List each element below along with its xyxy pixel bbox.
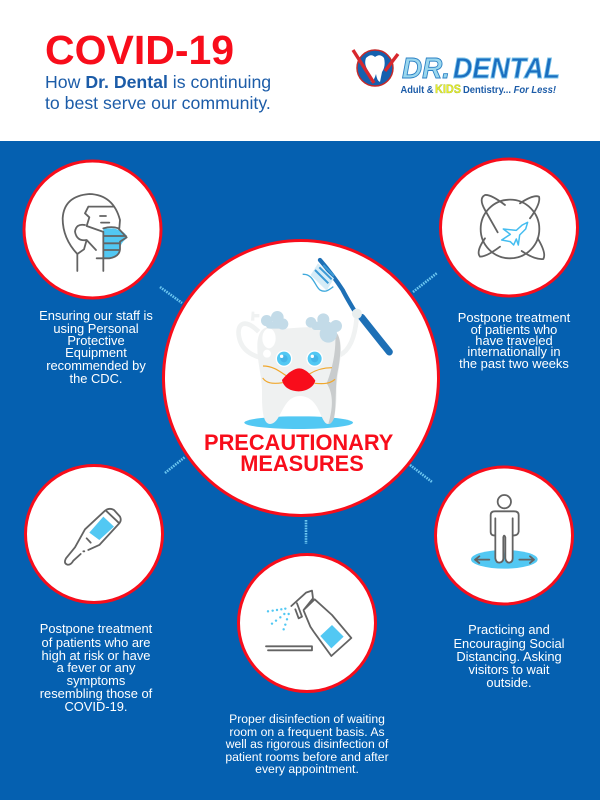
- text: travel: have traveled: [475, 333, 553, 348]
- text: PPE: Protective: [67, 333, 125, 348]
- logo: Dr. Dental: [353, 50, 560, 96]
- icon: thermometer: [65, 509, 121, 565]
- illustration: tooth with mask and toothbrush: [239, 260, 389, 429]
- foam: [261, 311, 342, 343]
- text: fever: high at risk or have: [42, 648, 150, 663]
- icon: spray bottle: [266, 591, 351, 656]
- text: PPE: Equipment: [65, 345, 127, 360]
- panel: personal protective equipment: [24, 161, 161, 386]
- text: disinfection: Proper disinfection of waiting: [229, 712, 385, 726]
- text: fever: a fever or any: [57, 660, 136, 675]
- text: PPE: Ensuring our staff is: [39, 308, 153, 323]
- text: travel: internationally in: [467, 344, 561, 359]
- panel: disinfection: [225, 554, 389, 776]
- panel: fever screening: [26, 466, 162, 714]
- panel: central precautionary measures: [164, 240, 438, 516]
- logo: Dr. Dental: Adult &: [400, 84, 434, 96]
- heading: precautionary measures: MEASURES: [240, 451, 364, 476]
- logo: Dr. Dental: Dentistry... For Less!: [463, 84, 556, 96]
- text: distancing: Distancing. Asking: [456, 649, 562, 664]
- text: fever: resembling those of: [40, 686, 153, 701]
- text: disinfection: room on a frequent basis. As: [229, 725, 385, 739]
- text: PPE: recommended by: [46, 358, 146, 373]
- text: travel: Postpone treatment: [458, 310, 570, 325]
- text: travel: the past two weeks: [459, 356, 569, 371]
- logo: Dr. Dental: DENTAL: [453, 53, 560, 85]
- text: disinfection: patient rooms before and after: [225, 750, 389, 764]
- text: PPE: using Personal: [53, 321, 139, 336]
- toothbrush: [303, 260, 389, 352]
- subtitle: How Dr. Dental is continuing: [45, 72, 271, 92]
- title: COVID-19: [45, 27, 234, 73]
- panel: social distancing: [436, 467, 572, 690]
- text: distancing: outside.: [486, 675, 532, 690]
- icon: masked head: [63, 194, 127, 271]
- text: fever: Postpone treatment: [40, 621, 152, 636]
- logo: Dr. Dental: DR.: [402, 53, 450, 85]
- heading: precautionary measures: PRECAUTIONARY: [204, 430, 394, 455]
- text: disinfection: well as rigorous disinfection of: [225, 737, 389, 751]
- text: PPE: the CDC.: [69, 371, 123, 386]
- mask: [263, 366, 335, 391]
- dotted connectors: [160, 273, 437, 544]
- text: fever: COVID-19.: [64, 699, 128, 714]
- icon: globe and plane: [479, 195, 544, 259]
- text: distancing: Encouraging Social: [453, 636, 565, 651]
- text: travel: of patients who: [471, 322, 557, 337]
- text: fever: symptoms: [67, 673, 125, 688]
- subtitle: to best serve our community.: [45, 93, 271, 113]
- logo: Dr. Dental: KIDS: [435, 84, 461, 96]
- text: distancing: visitors to wait: [469, 662, 550, 677]
- panel: postpone travellers: [440, 159, 578, 371]
- icon: person with arrows: [471, 495, 538, 569]
- text: disinfection: every appointment.: [255, 762, 359, 776]
- eyes: [276, 350, 323, 367]
- text: fever: of patients who are: [42, 635, 150, 650]
- text: distancing: Practicing and: [468, 622, 550, 637]
